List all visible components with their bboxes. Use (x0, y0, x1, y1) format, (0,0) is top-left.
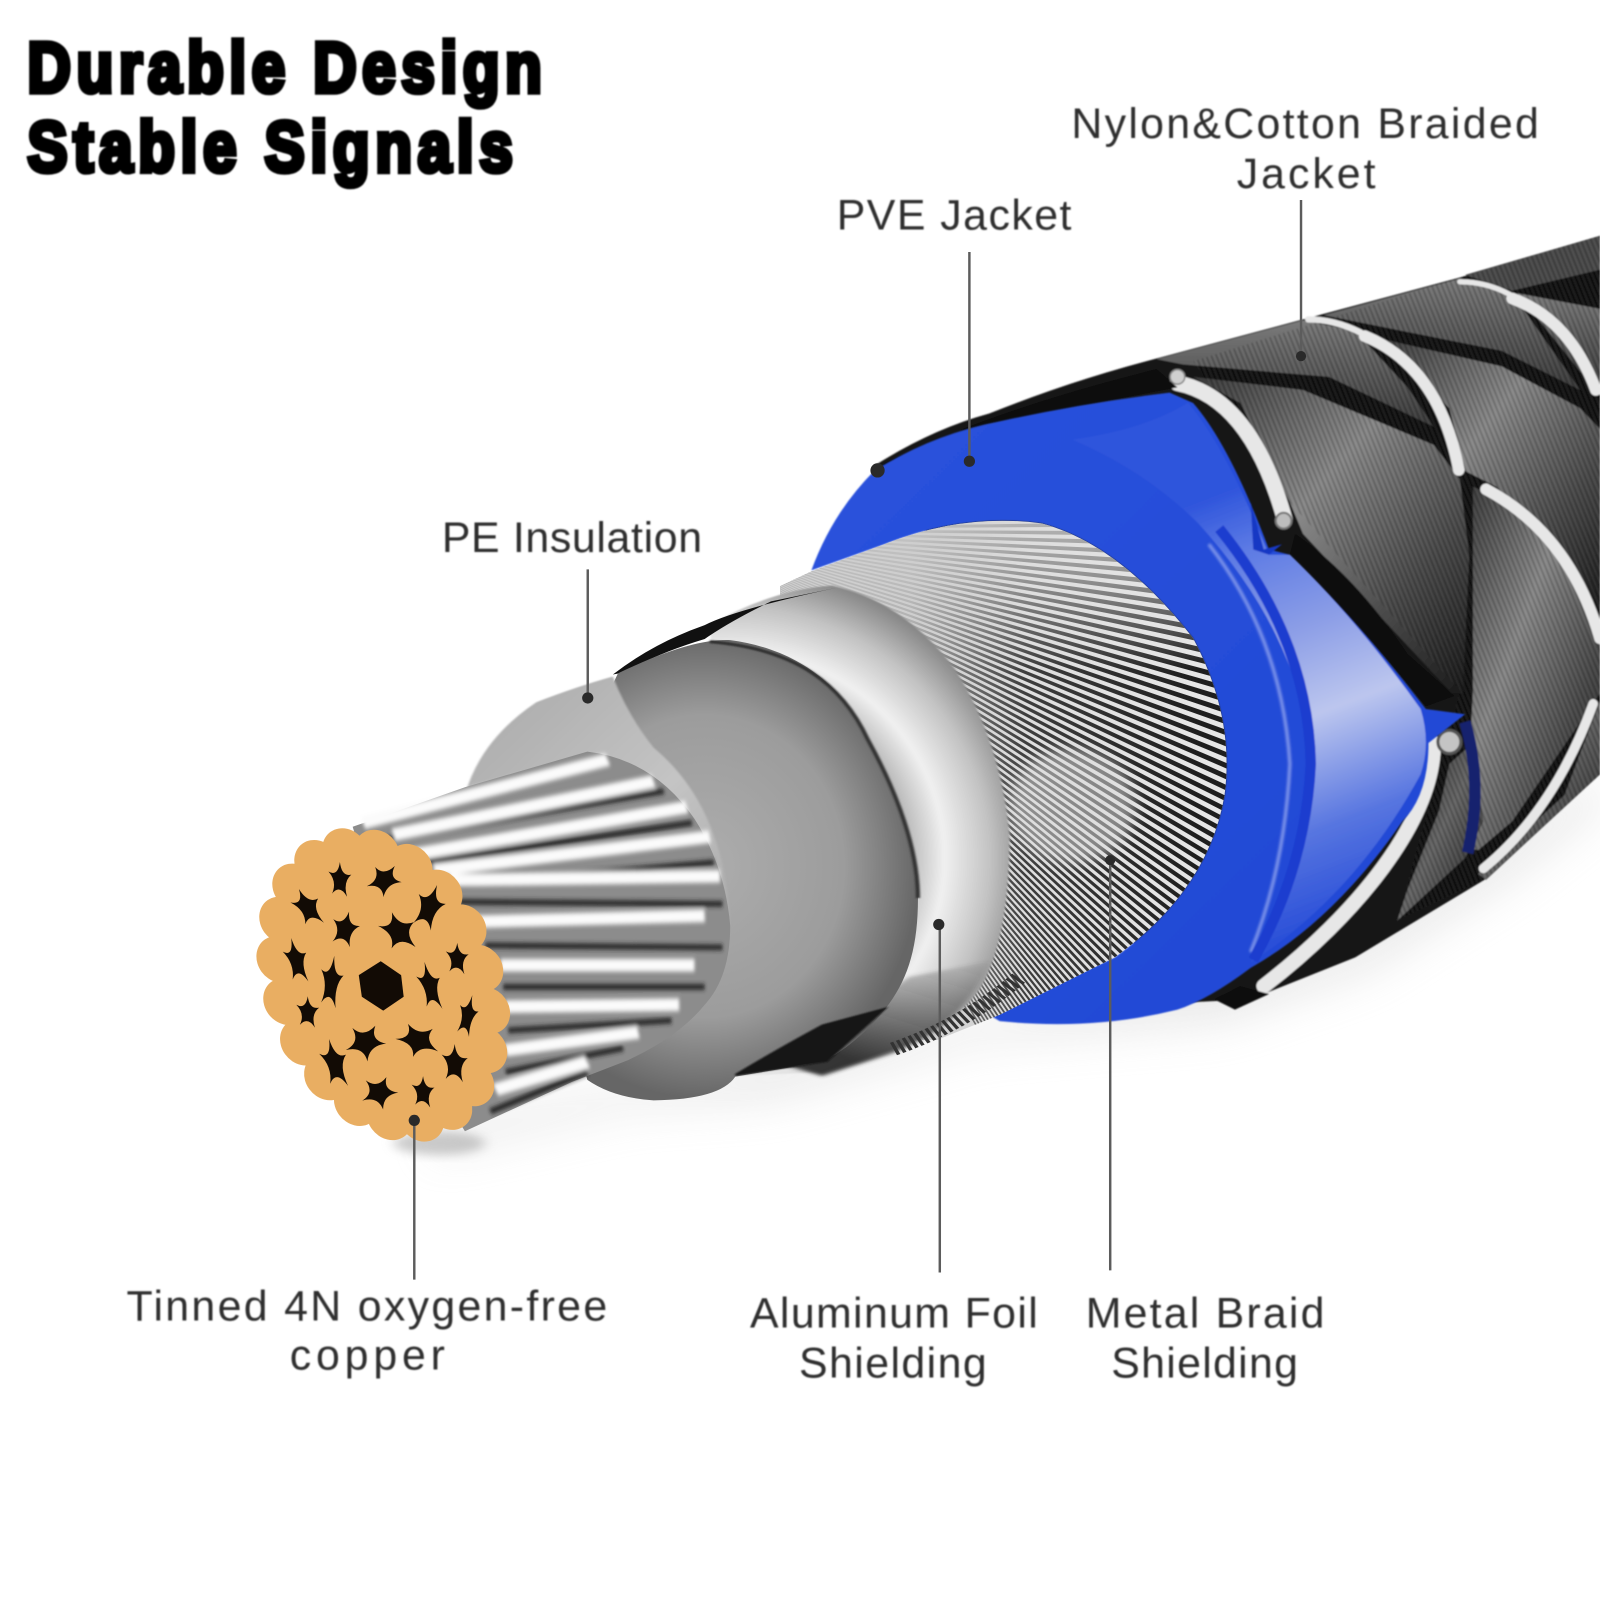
label: nylon and cotton braided jacket: Jacket (1237, 150, 1376, 198)
label: metal braid shielding (1086, 1290, 1324, 1388)
label: aluminum foil shielding (750, 1290, 1038, 1388)
jacket base (874, 236, 1600, 1004)
copper shadow (393, 1131, 485, 1155)
inner insulation (526, 640, 918, 1100)
dark wedge at base (735, 1007, 888, 1076)
braided nylon and cotton jacket (874, 236, 1600, 1010)
ring base (811, 393, 1465, 1024)
title: Stable Signals (28, 106, 513, 187)
label: metal braid shielding: Metal Braid (1086, 1290, 1324, 1338)
dark blue notch (1251, 502, 1282, 555)
thread end caps (1170, 370, 1461, 753)
label: nylon and cotton braided jacket (1071, 100, 1539, 198)
lighter outer surface (1073, 403, 1426, 963)
foil shaded bottom (781, 961, 990, 1076)
label: metal braid shielding: Shielding (1111, 1340, 1298, 1388)
fibre texture (1193, 236, 1600, 921)
black sliver above insulation (613, 588, 837, 675)
insulation front flare (465, 677, 730, 926)
label: aluminum foil shielding: Shielding (799, 1340, 987, 1388)
braid centre highlight (1010, 748, 1136, 863)
braid fan of stripes (780, 524, 1226, 1025)
dark edge of insulation (710, 642, 918, 898)
copper end face (219, 808, 547, 1162)
black gaps between strands (280, 860, 482, 1111)
label: tinned copper (127, 1282, 607, 1379)
white thread arcs (1177, 282, 1600, 986)
label: aluminum foil shielding: Aluminum Foil (750, 1290, 1038, 1338)
blue PVE jacket ring (811, 393, 1465, 1024)
dark shadow under thread (1290, 534, 1455, 706)
label: nylon and cotton braided jacket: Nylon&Cotton Braided (1071, 100, 1539, 148)
foil band (710, 586, 1010, 1076)
label: PVE jacket: PVE Jacket (837, 192, 1072, 240)
cable soft shadow (429, 776, 1600, 1153)
frayed braid edge (893, 977, 1020, 1049)
braid base (849, 520, 1226, 1029)
black end of jacket (1214, 986, 1269, 1010)
ring dark edge (1219, 529, 1311, 960)
aluminum foil shielding and PE insulation (465, 586, 1020, 1100)
label: PE insulation: PE Insulation (442, 514, 702, 562)
navy inner strip (1465, 722, 1475, 853)
strand base (353, 752, 730, 1131)
ring highlight (1209, 544, 1290, 952)
leader dots (409, 351, 1306, 1126)
braid sheen (780, 520, 1154, 1040)
central hexagon gap (359, 961, 404, 1011)
braid segments (1157, 236, 1600, 921)
title: Durable Design (28, 27, 542, 107)
strand shading (363, 760, 723, 1111)
title (28, 27, 542, 187)
black gap above blue ring (879, 369, 1177, 471)
cable illustration (256, 234, 1600, 1160)
copper base (219, 808, 547, 1162)
leader lines (414, 200, 1301, 1280)
metal braid shielding (780, 520, 1226, 1040)
label: tinned copper: Tinned 4N oxygen-free (127, 1282, 607, 1330)
label: tinned copper: copper (290, 1331, 445, 1379)
tinned copper strands (353, 752, 730, 1131)
